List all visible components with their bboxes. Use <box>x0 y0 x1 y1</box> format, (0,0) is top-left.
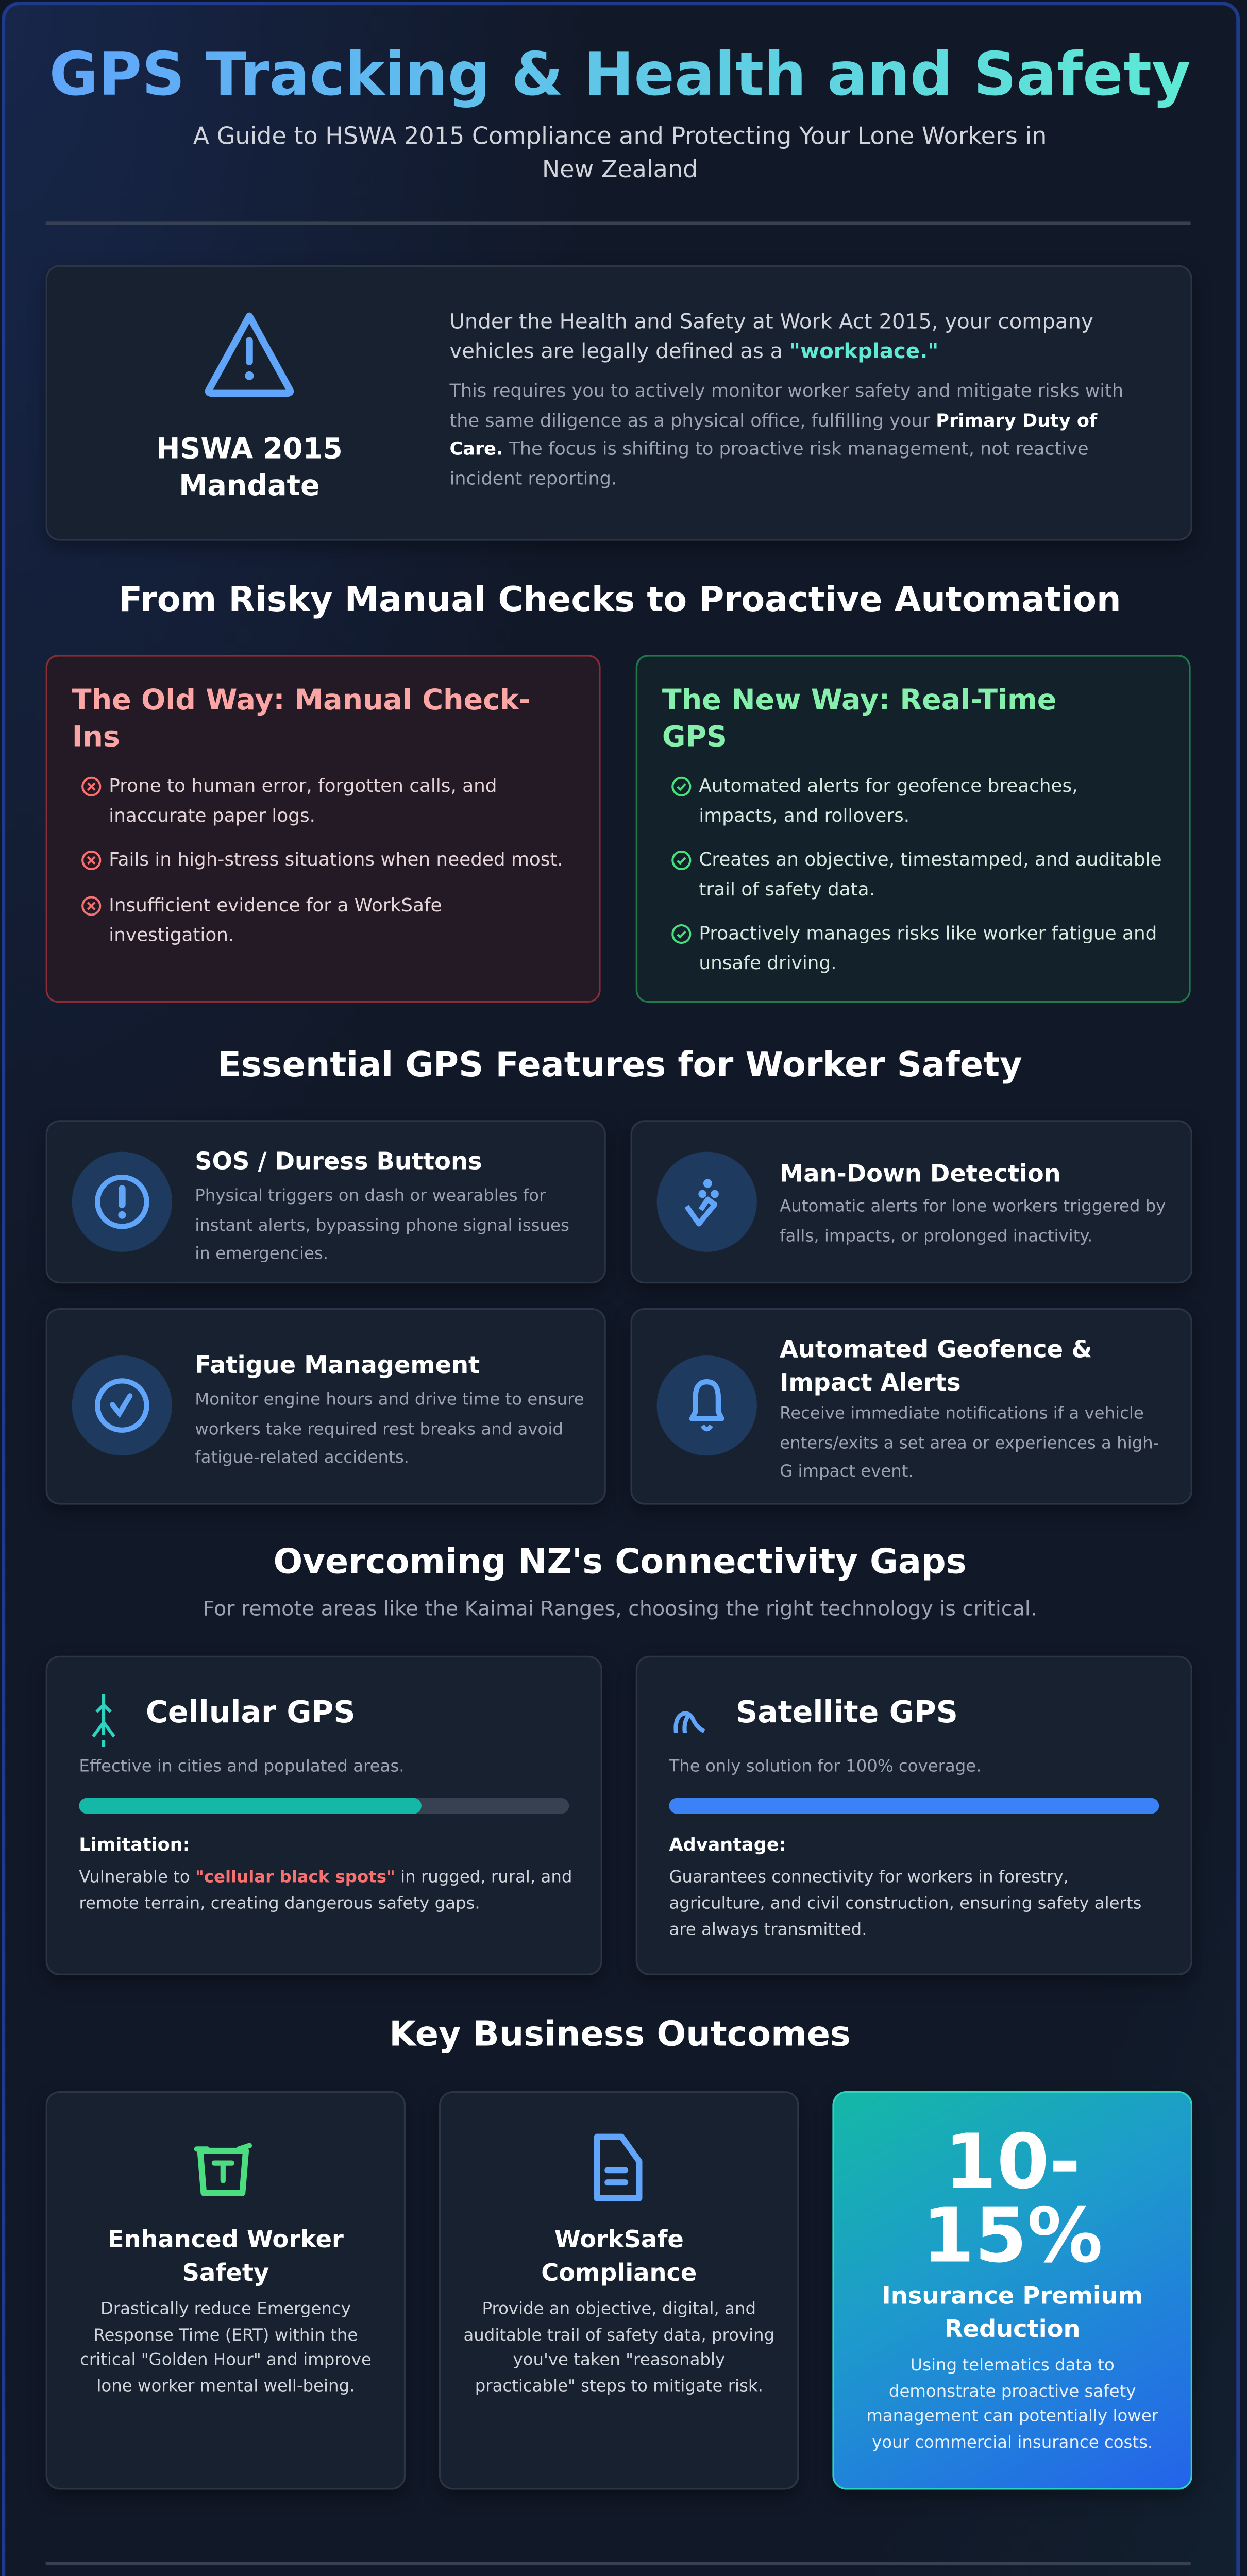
panel: Fatigue: Monitor engine hours and drive time to ensure workers take required rest breaks and avoid fatigue-related accidents. <box>195 1391 584 1468</box>
list: new way items: Proactively manages risks like worker fatigue and unsafe driving. <box>699 924 1157 974</box>
heading: cellular: Cellular GPS <box>146 1696 356 1731</box>
subheading: connectivity: For remote areas like the Kaimai Ranges, choosing the right technology is critical. <box>203 1596 1037 1621</box>
panel: Satellite GPS: The only solution for 100% coverage. <box>669 1757 981 1777</box>
list: new way items <box>671 776 1162 974</box>
panel: Cellular GPS: Limitation: <box>79 1835 190 1856</box>
icon: fatigue check <box>72 1355 172 1455</box>
text: worker safety: Enhanced Worker Safety <box>108 2226 344 2288</box>
text: fatigue: Fatigue Management <box>195 1352 480 1380</box>
icon: bell <box>657 1355 757 1455</box>
list: old way items <box>81 776 563 945</box>
panel: Fatigue <box>46 1308 606 1505</box>
text block: mandate description <box>449 309 1123 489</box>
panel: Man-Down <box>630 1120 1192 1283</box>
panel: old way <box>46 655 601 1003</box>
list: new way items: Automated alerts for geofence breaches, impacts, and rollovers. <box>699 776 1078 826</box>
icon: satellite <box>673 1711 705 1733</box>
text block: mandate description: This requires you to actively monitor worker safety and mitigate risks with the same diligence as a physical office, fulfilling your Primary Duty of Care. The focus is shifting to proactive risk management, not reactive incident reporting. <box>449 381 1123 489</box>
heading: satellite: Satellite GPS <box>736 1696 958 1731</box>
panel: Satellite GPS <box>636 1656 1192 1975</box>
bar: satellite coverage <box>669 1798 1159 1814</box>
panel: Enhanced Worker Safety <box>46 2091 406 2490</box>
stat: 10-15%: 15% <box>922 2193 1103 2281</box>
panel: Insurance reduction: Using telematics data to demonstrate proactive safety management can potentially lower your commercial insurance costs. <box>866 2357 1158 2452</box>
panel: SOS / Duress: Physical triggers on dash or wearables for instant alerts, bypassing phone signal issues in emergencies. <box>195 1187 569 1264</box>
title: GPS Tracking & Health and Safety <box>49 40 1191 111</box>
icon: document <box>594 2134 642 2201</box>
heading: HSWA 2015 Mandate: Mandate <box>179 469 320 502</box>
panel: Cellular GPS: Effective in cities and populated areas. <box>79 1757 405 1777</box>
panel: Man-Down: Automatic alerts for lone workers triggered by falls, impacts, or prolonged inactivity. <box>780 1197 1166 1246</box>
text: insurance: Insurance Premium Reduction <box>882 2282 1143 2344</box>
heading: Key Business Outcomes: Key Business Outcomes <box>389 2014 851 2054</box>
panel: WorkSafe Compliance <box>439 2091 799 2490</box>
panel: HSWA mandate <box>46 265 1192 541</box>
heading: old way: The Old Way: Manual Check-Ins <box>72 683 531 753</box>
icon: man down <box>657 1152 757 1252</box>
text: worksafe: WorkSafe Compliance <box>541 2226 697 2288</box>
panel: new way <box>636 655 1191 1003</box>
heading: From Risky Manual Checks: From Risky Manual Checks to Proactive Automation <box>119 580 1121 620</box>
subtitle: A Guide to HSWA 2015 Compliance and Protecting Your Lone Workers in New Zealand <box>193 123 1047 184</box>
heading: Connectivity gaps: Overcoming NZ's Connectivity Gaps <box>274 1541 966 1582</box>
bar: cellular coverage <box>79 1798 569 1814</box>
panel: Enhanced Worker Safety: Drastically reduce Emergency Response Time (ERT) within the critical "Golden Hour" and improve lone worker mental well-being. <box>80 2300 372 2396</box>
panel: WorkSafe Compliance: Provide an objective, digital, and auditable trail of safety data, proving you've taken "reasonably practicable" steps to mitigate risk. <box>463 2300 774 2396</box>
panel: Satellite GPS: Guarantees connectivity for workers in forestry, agriculture, and civil construction, ensuring safety alerts are always transmitted. <box>669 1868 1141 1940</box>
heading: Essential GPS Features: Essential GPS Features for Worker Safety <box>217 1045 1022 1085</box>
list: new way items: Creates an objective, timestamped, and auditable trail of safety data. <box>699 850 1162 900</box>
heading: HSWA 2015 Mandate: HSWA 2015 <box>156 432 343 465</box>
panel: Geofence <box>630 1308 1192 1505</box>
list: old way items: Fails in high-stress situations when needed most. <box>109 850 563 871</box>
icon: warning triangle <box>205 312 294 397</box>
heading: HSWA 2015 Mandate <box>156 432 343 502</box>
icon: SOS <box>72 1152 172 1252</box>
panel: Cellular GPS <box>46 1656 602 1975</box>
panel: Satellite GPS: Advantage: <box>669 1835 786 1856</box>
text: man down: Man-Down Detection <box>780 1161 1061 1189</box>
panel: Cellular GPS: Vulnerable to "cellular black spots" in rugged, rural, and remote terrain, creating dangerous safety gaps. <box>79 1868 572 1914</box>
text: geofence: Automated Geofence & Impact Alerts <box>780 1336 1092 1398</box>
icon: first aid kit <box>194 2143 252 2196</box>
list: old way items: Insufficient evidence for a WorkSafe investigation. <box>109 895 442 945</box>
stat: 10-15% <box>922 2119 1103 2281</box>
panel: Insurance reduction <box>832 2091 1192 2490</box>
heading: new way: The New Way: Real-Time GPS <box>662 683 1056 753</box>
panel: Geofence: Receive immediate notifications if a vehicle enters/exits a set area or experiences a high-G impact event. <box>780 1404 1159 1482</box>
text: SOS: SOS / Duress Buttons <box>195 1148 482 1176</box>
icon: cell tower <box>92 1694 115 1747</box>
text block: mandate description: Under the Health and Safety at Work Act 2015, your company vehicles are legally defined as a "workplace." <box>449 309 1093 363</box>
list: old way items: Prone to human error, forgotten calls, and inaccurate paper logs. <box>109 776 497 826</box>
panel: SOS / Duress <box>46 1120 606 1283</box>
stat: 10-15%: 10- <box>944 2119 1081 2207</box>
